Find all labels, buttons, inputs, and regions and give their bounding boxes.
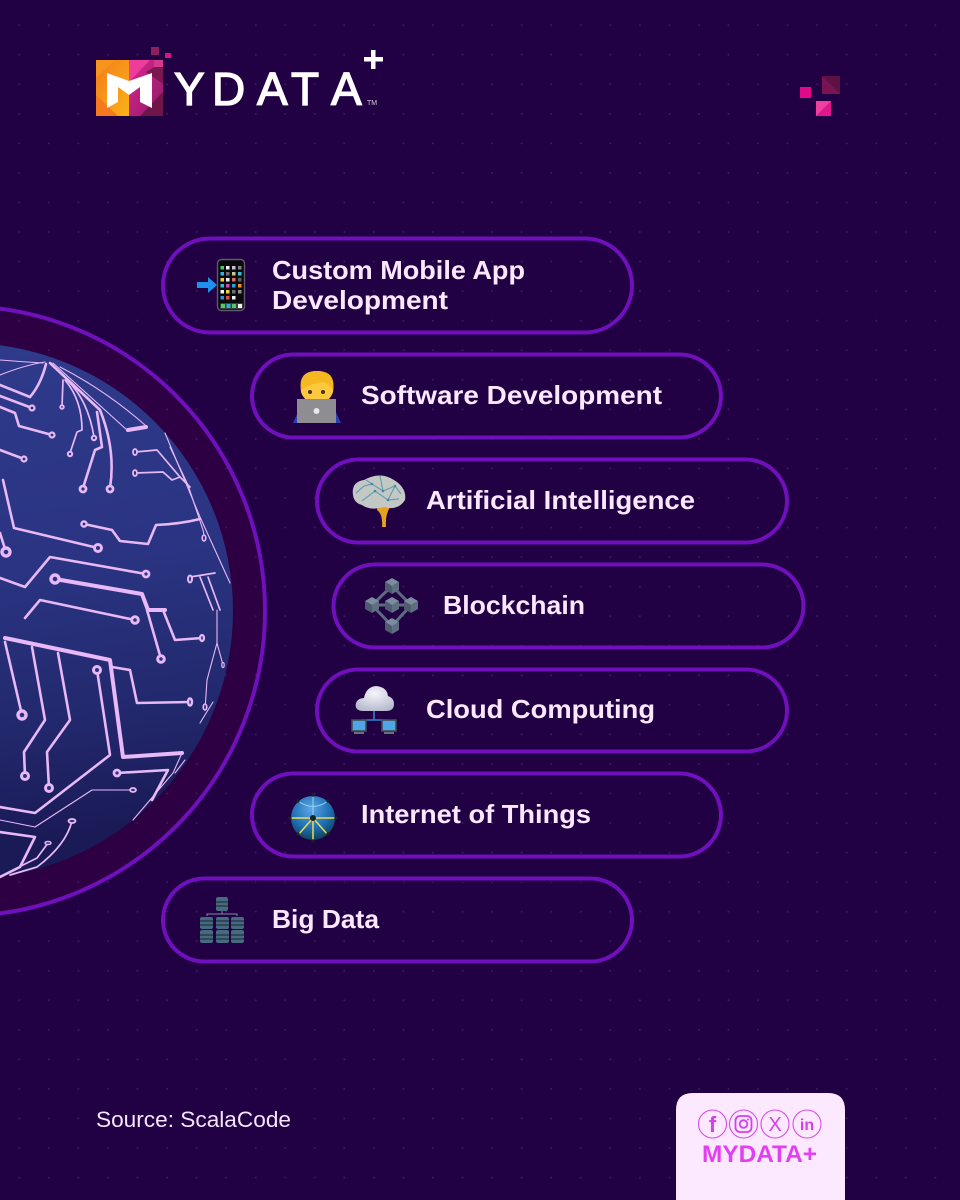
label: Custom Mobile App xyxy=(272,255,525,285)
pill: big data xyxy=(163,878,632,962)
icon: network globe xyxy=(288,793,338,843)
label: Artificial Intelligence xyxy=(426,485,695,515)
icon: database stacks xyxy=(200,897,244,943)
pill: software development xyxy=(252,354,721,438)
icon: x: X xyxy=(768,1114,782,1136)
label: Cloud Computing xyxy=(426,694,655,724)
icon: cloud network xyxy=(352,686,396,734)
circuit traces xyxy=(0,360,230,877)
pill: custom mobile app development: Development xyxy=(272,285,448,315)
social card xyxy=(676,1093,845,1200)
label: Blockchain xyxy=(443,590,585,620)
icon: technologist at laptop xyxy=(293,371,341,423)
pill: internet of things xyxy=(252,774,721,856)
outer ring around globe xyxy=(0,306,265,916)
label: Software Development xyxy=(361,380,662,410)
logo: MYDATA+: D xyxy=(212,63,245,115)
icon: brain xyxy=(353,476,405,527)
logo: MYDATA+: Y xyxy=(174,63,205,115)
pill: artificial intelligence xyxy=(317,460,787,542)
icon: x xyxy=(761,1110,789,1138)
pill: cloud computing xyxy=(317,670,787,752)
decorative pink squares xyxy=(800,76,840,116)
logo: MYDATA+: TM xyxy=(367,100,377,107)
brand name: MYDATA+ xyxy=(702,1141,817,1168)
icon: linkedin: in xyxy=(800,1117,814,1134)
icon: facebook xyxy=(698,1110,726,1138)
logo: MYDATA+: A xyxy=(331,63,362,115)
icon: instagram xyxy=(730,1110,758,1138)
pill: blockchain xyxy=(334,564,804,648)
logo: MYDATA+: A xyxy=(257,63,288,115)
icon: facebook: f xyxy=(709,1112,717,1137)
icon: linkedin xyxy=(793,1110,821,1138)
circuit nodes xyxy=(2,405,224,845)
icon: mobile phone with arrow xyxy=(197,260,244,310)
icon: linked blocks xyxy=(365,578,418,634)
label: Big Data xyxy=(272,904,380,934)
pill: custom mobile app development xyxy=(163,238,632,332)
source note: Source: ScalaCode xyxy=(96,1107,291,1132)
logo: MYDATA+: T xyxy=(291,63,319,115)
logo: MYDATA+ xyxy=(96,47,383,116)
circuit globe xyxy=(0,343,233,879)
label: Internet of Things xyxy=(361,799,591,829)
